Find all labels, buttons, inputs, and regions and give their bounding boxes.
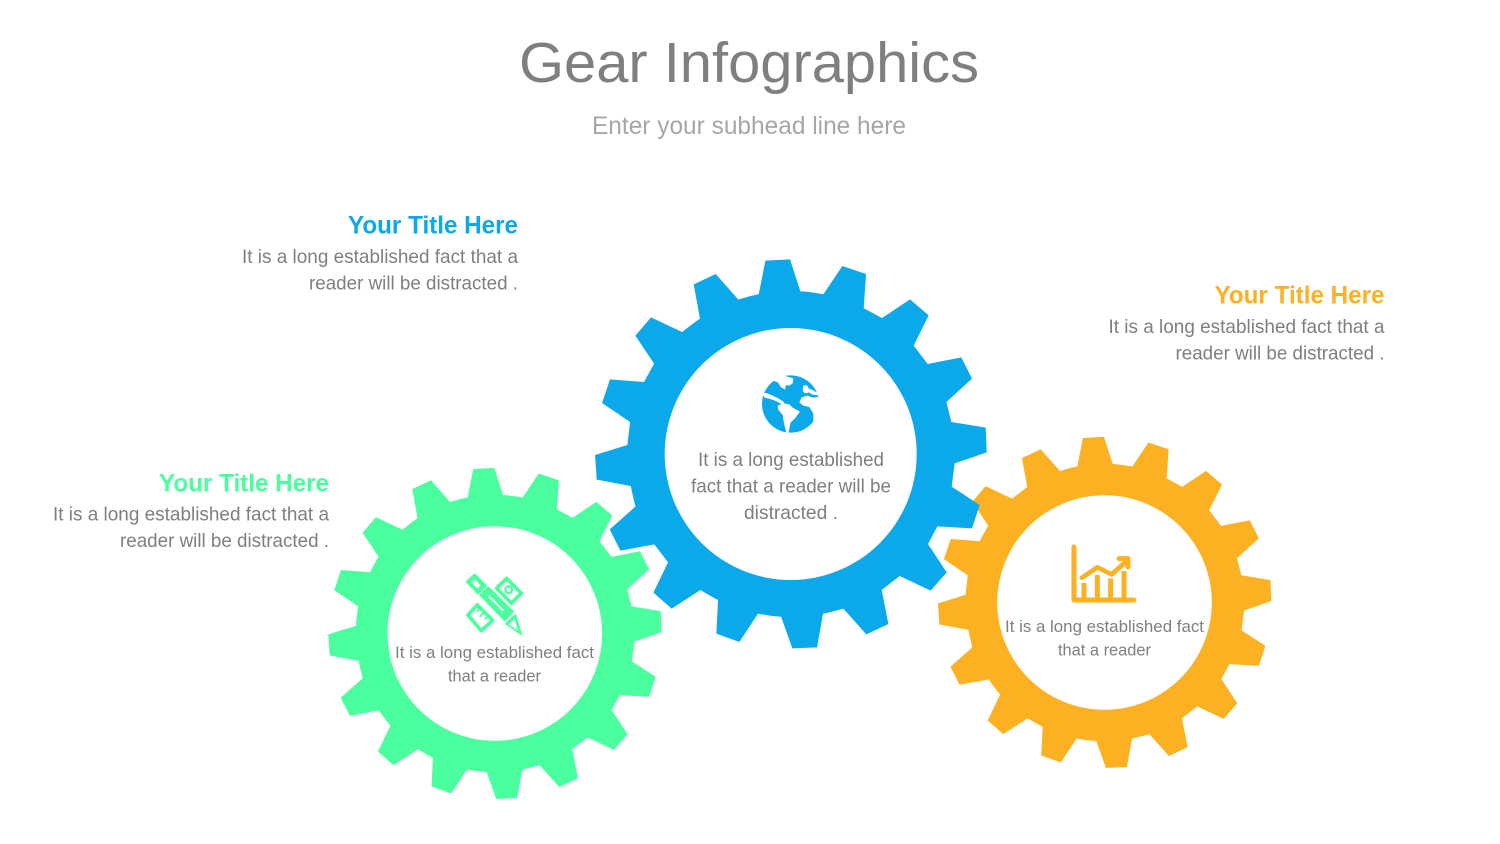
text block: green gear text — [395, 643, 594, 686]
panel: blue gear — [595, 259, 987, 648]
text block: blue gear text — [691, 449, 891, 524]
gear centre — [388, 526, 602, 741]
text block: blue description — [242, 246, 518, 294]
gear centre — [997, 495, 1212, 710]
text block: blue gear text: It is a long established — [698, 449, 884, 471]
text block: green description: It is a long established fact that a — [53, 504, 329, 526]
text block: orange gear text: that a reader — [1058, 640, 1151, 660]
heading: orange title: Your Title Here — [1214, 282, 1385, 310]
text block: orange description: It is a long established fact that a — [1108, 316, 1385, 338]
panel: green caption — [53, 470, 329, 552]
subhead: Enter your subhead line here — [592, 112, 906, 140]
text block: green gear text: It is a long established fact — [395, 643, 594, 662]
icon: pencil and ruler — [467, 575, 521, 634]
text block: orange description: reader will be distracted . — [1176, 342, 1384, 364]
title: Gear Infographics — [519, 31, 979, 95]
text block: green description: reader will be distracted . — [120, 530, 329, 552]
panel: blue caption — [242, 212, 518, 294]
gear centre — [665, 328, 917, 580]
gear: blue — [595, 259, 987, 648]
text block: orange gear text — [1005, 617, 1204, 660]
heading: blue title: Your Title Here — [348, 212, 518, 240]
panel: orange caption — [1108, 282, 1385, 364]
text block: green description — [53, 504, 329, 552]
panel: green gear — [328, 468, 662, 799]
text block: orange description — [1108, 316, 1385, 364]
icon: rising bar chart — [1074, 547, 1134, 600]
panel: orange gear — [938, 437, 1271, 768]
text block: blue gear text: distracted . — [744, 502, 838, 524]
icon: globe — [762, 375, 823, 434]
text block: orange gear text: It is a long established fact — [1005, 617, 1204, 636]
gear: green — [328, 468, 662, 799]
text block: green gear text: that a reader — [448, 666, 541, 686]
text block: blue gear text: fact that a reader will be — [691, 476, 891, 498]
text block: blue description: It is a long established fact that a — [242, 246, 518, 268]
gear: orange — [938, 437, 1271, 768]
text block: blue description: reader will be distracted . — [309, 272, 518, 294]
heading: green title: Your Title Here — [159, 470, 329, 498]
